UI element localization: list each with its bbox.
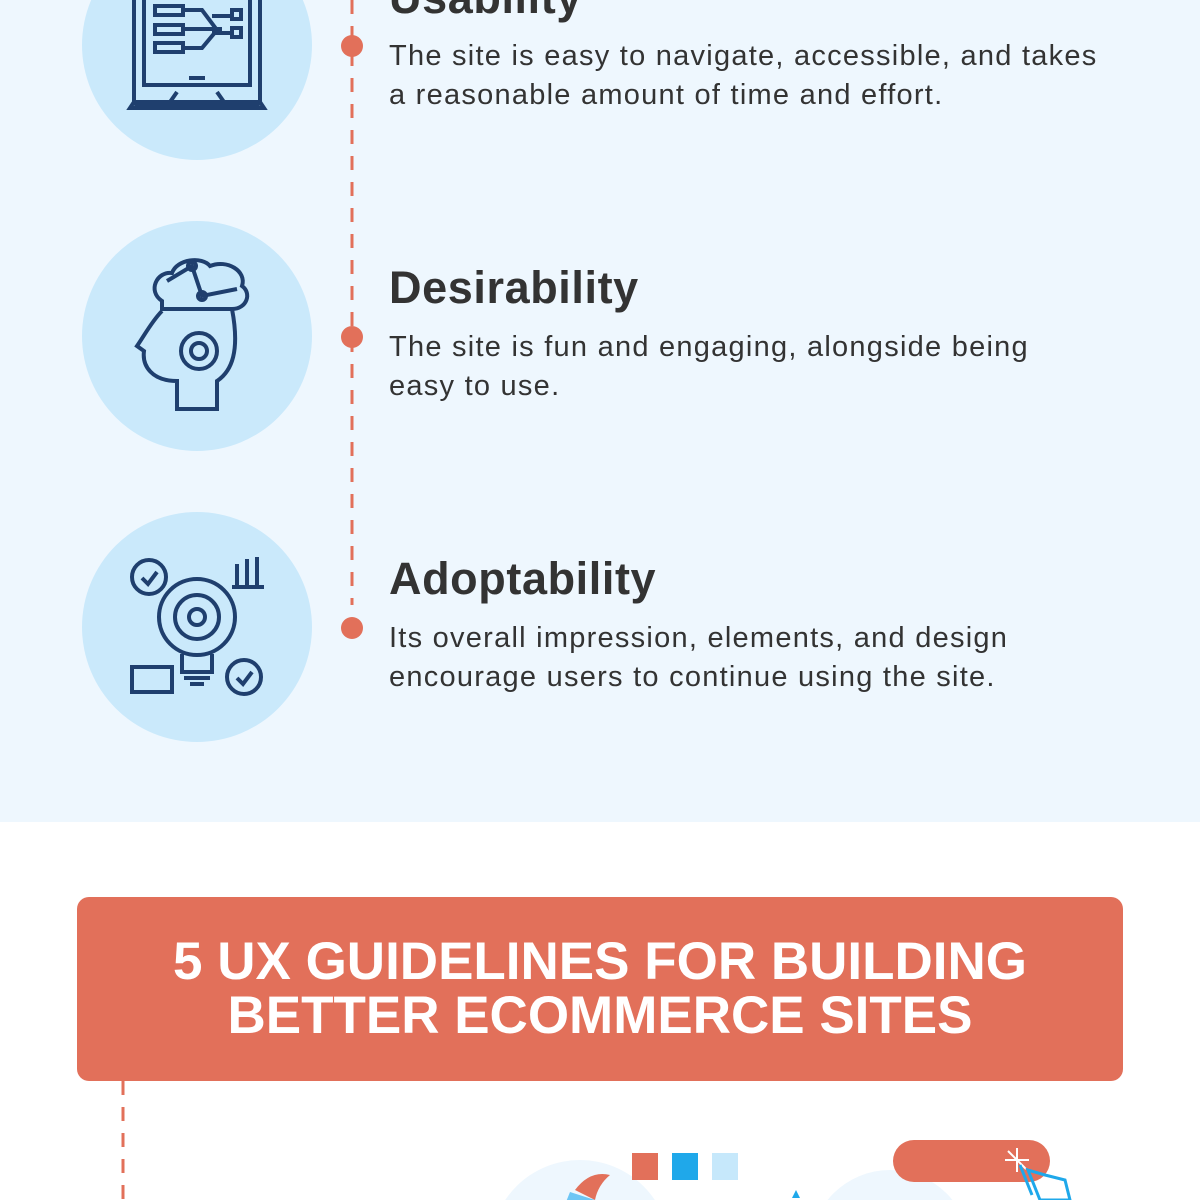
heading: Desirability: Desirability — [389, 262, 639, 313]
illustration: color swatches and button — [506, 1140, 1072, 1200]
icon: head with gear — [82, 221, 312, 451]
icon: lightbulb gear — [82, 512, 312, 742]
heading: Adoptability: Adoptability — [389, 553, 656, 604]
background top section — [0, 0, 1200, 822]
dot 1 — [341, 35, 363, 57]
banner: 5 UX guidelines: 5 UX GUIDELINES FOR BUILDING — [173, 932, 1027, 991]
banner: 5 UX guidelines — [77, 897, 1123, 1081]
banner: 5 UX guidelines: BETTER ECOMMERCE SITES — [227, 986, 972, 1045]
text: usability: The site is easy to navigate, accessible, and takes a reasonable amount of time and effort. — [389, 40, 1098, 111]
text: adoptability: Its overall impression, elements, and design encourage users to continue using the site. — [389, 622, 1008, 693]
text: desirability: The site is fun and engaging, alongside being easy to use. — [389, 331, 1029, 402]
dot 3 — [341, 617, 363, 639]
dot 2 — [341, 326, 363, 348]
icon: monitor — [82, 0, 312, 160]
